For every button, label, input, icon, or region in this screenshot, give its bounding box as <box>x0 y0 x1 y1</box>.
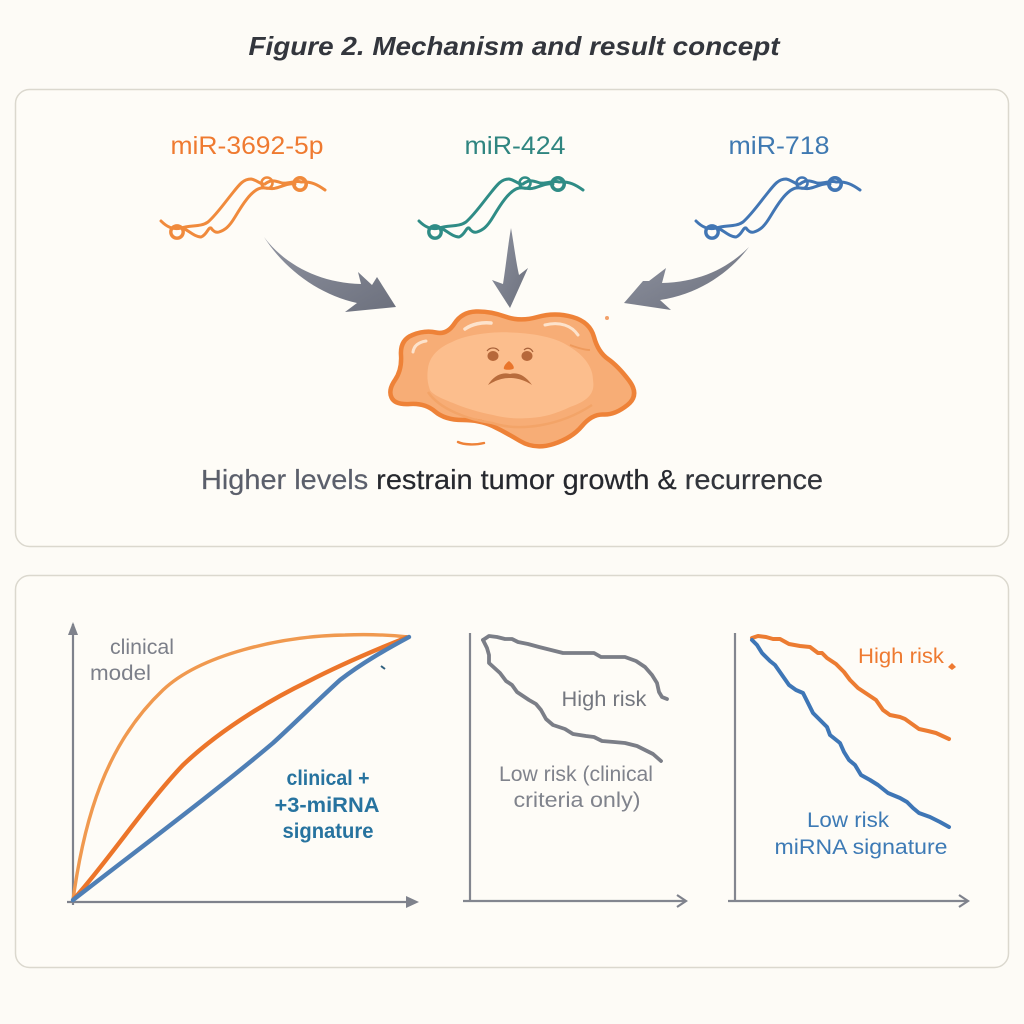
icon: orange RNA strand <box>161 178 325 238</box>
curve: high risk orange <box>752 636 949 739</box>
chart: survival miRNA signature <box>728 633 968 901</box>
label: clinical + 3-miRNA signature: signature <box>282 820 374 843</box>
label: low risk miRNA signature: miRNA signature <box>774 835 948 859</box>
label: high risk orange: High risk <box>858 644 944 668</box>
label: low risk miRNA signature <box>774 808 948 859</box>
axes <box>67 622 419 908</box>
label: miR-3692-5p: miR-3692-5p <box>170 132 324 160</box>
caption: tumor effect: Higher levels restrain tumor growth & recurrence <box>201 464 823 495</box>
axes <box>728 633 968 901</box>
chart: survival clinical only <box>463 633 686 901</box>
panel: results <box>16 576 1008 968</box>
curve: high risk gray <box>483 636 667 699</box>
label: clinical model: clinical <box>110 636 174 659</box>
label: low risk clinical criteria only <box>499 762 653 812</box>
arrow: right to tumor <box>624 247 749 310</box>
curve: low risk gray <box>483 640 661 761</box>
curve: clinical light orange <box>73 635 408 900</box>
curve: low risk blue <box>752 640 949 827</box>
panel: mechanism <box>16 90 1008 546</box>
arrow: center to tumor <box>492 228 528 308</box>
label: low risk clinical criteria only: Low risk (clinical <box>499 762 653 786</box>
curve: mid orange <box>73 637 408 900</box>
curve: blue signature <box>73 637 409 900</box>
label: clinical + 3-miRNA signature: +3-miRNA <box>274 794 380 817</box>
label: high risk gray: High risk <box>562 687 647 711</box>
label: miR-424: miR-424 <box>464 132 566 160</box>
label: clinical + 3-miRNA signature: clinical + <box>286 767 370 790</box>
axes <box>463 633 686 901</box>
icon: tumor with sad face <box>390 311 634 446</box>
label: clinical model: model <box>90 662 151 685</box>
label: miR-718: miR-718 <box>728 132 830 160</box>
label: clinical model <box>90 636 174 685</box>
title: Figure 2. Mechanism and result concept <box>248 31 781 61</box>
arrow: left to tumor <box>264 237 396 312</box>
icon: teal RNA strand <box>419 178 583 238</box>
label: low risk clinical criteria only: criteria only) <box>514 788 640 812</box>
label: clinical + 3-miRNA signature <box>274 767 380 843</box>
label: low risk miRNA signature: Low risk <box>807 808 889 832</box>
chart: ROC curves <box>67 622 419 908</box>
icon: blue RNA strand <box>696 178 860 238</box>
